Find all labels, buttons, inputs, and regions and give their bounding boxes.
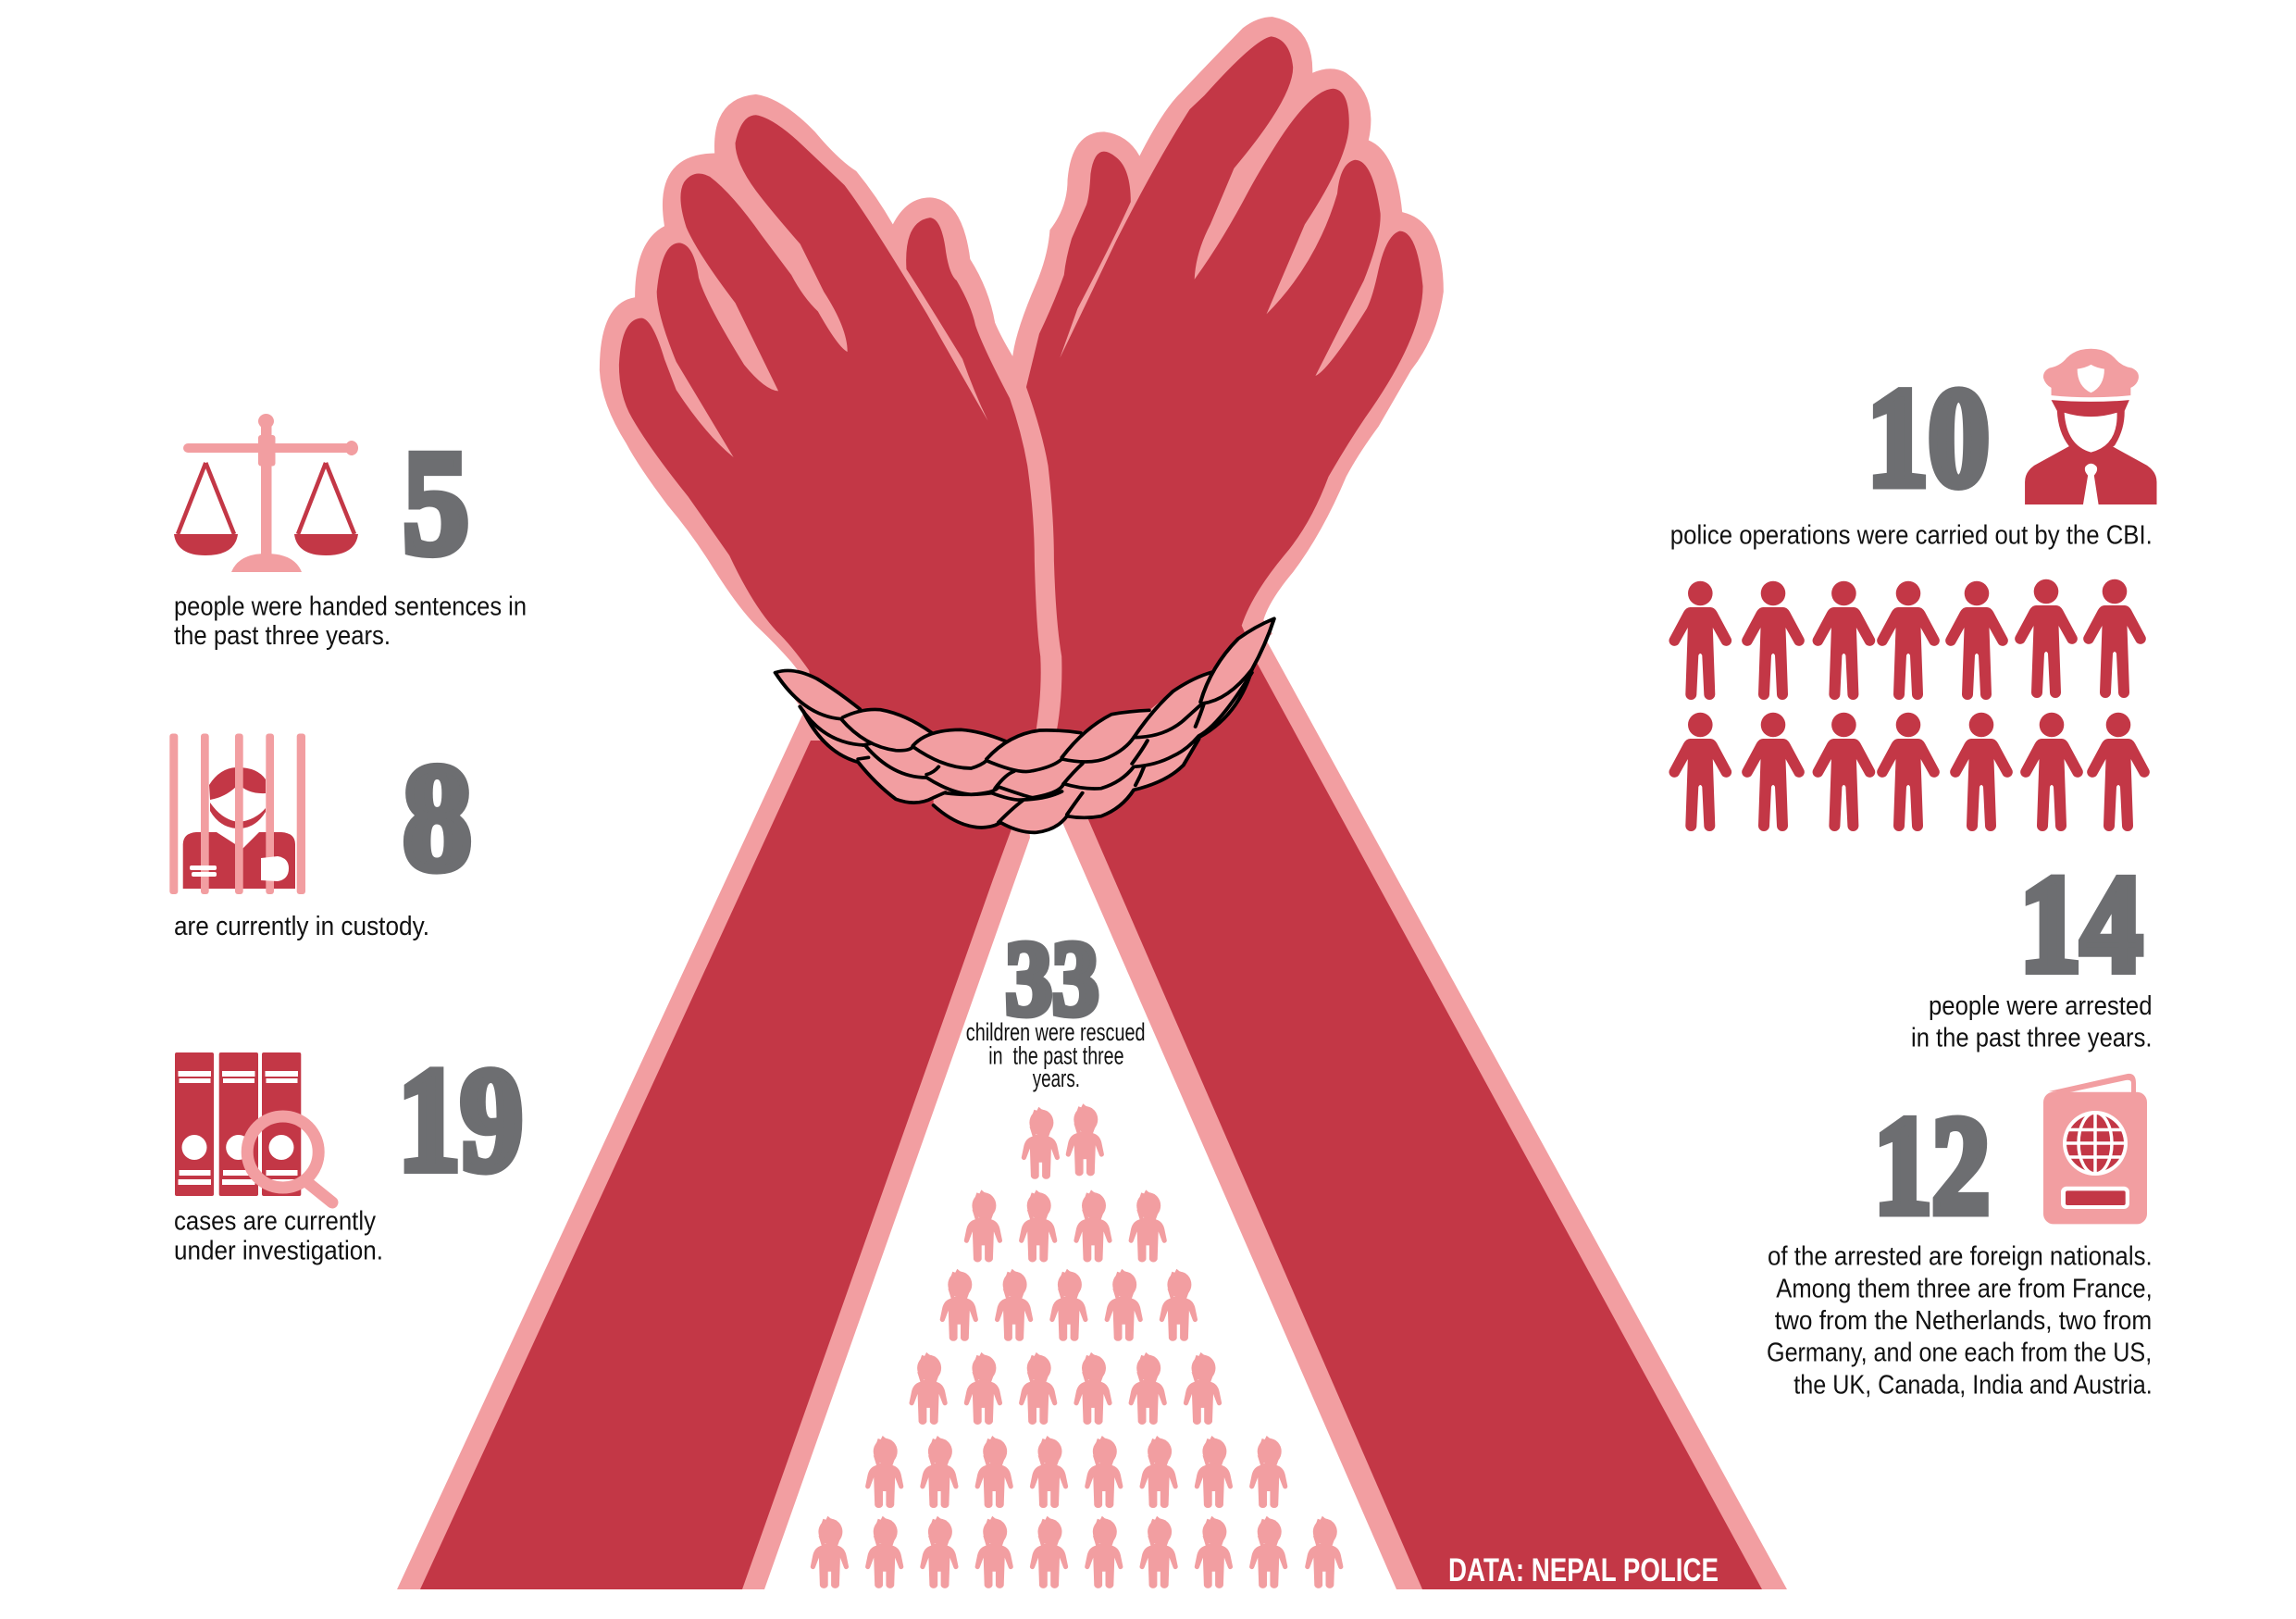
text: foreign nationals: Germany, and one each from the US, — [1767, 1339, 2152, 1368]
panel: investigation — [174, 1037, 523, 1266]
panel: custody — [169, 733, 472, 941]
text: children rescued: years. — [1033, 1065, 1080, 1092]
number: 10: 10 — [1868, 359, 1990, 515]
number: 33: 33 — [1005, 920, 1099, 1037]
left arm — [397, 699, 1030, 1589]
icon: case files and magnifier — [175, 1052, 332, 1202]
text: arrests: people were arrested — [1929, 991, 2153, 1021]
text: arrests — [1911, 991, 2153, 1053]
icon group: 33 children — [811, 1103, 1343, 1588]
panel: bound hands and arms illustration — [397, 17, 1787, 1589]
number: 8: 8 — [403, 734, 472, 902]
panel: arrests — [1911, 848, 2153, 1053]
number: 5: 5 — [403, 420, 469, 585]
panel: sentences — [174, 414, 527, 651]
text: foreign nationals: the UK, Canada, India and Austria. — [1793, 1370, 2153, 1400]
text: investigation: cases are currently — [174, 1207, 376, 1237]
text: investigation — [174, 1207, 383, 1266]
text: children rescued: in the past three — [988, 1042, 1123, 1070]
text: custody: are currently in custody. — [174, 912, 429, 941]
text: foreign nationals: Among them three are from France, — [1776, 1274, 2153, 1303]
text: children rescued: children were rescued — [966, 1018, 1146, 1046]
text: sentences: the past three years. — [174, 621, 391, 651]
text: children rescued — [966, 1018, 1146, 1092]
text: foreign nationals: two from the Netherlands, two from — [1775, 1306, 2152, 1336]
text: foreign nationals — [1767, 1242, 2153, 1400]
icon: prisoner behind bars — [169, 733, 305, 894]
icon: police officer — [2025, 349, 2157, 504]
text: sentences: people were handed sentences in — [174, 592, 527, 622]
source credit: DATA: NEPAL POLICE — [1448, 1552, 1719, 1588]
text: arrests: in the past three years. — [1911, 1024, 2153, 1053]
hands — [600, 17, 1444, 797]
text: foreign nationals: of the arrested are foreign nationals. — [1768, 1242, 2153, 1272]
panel: foreign nationals — [1767, 1074, 2153, 1400]
text: investigation: under investigation. — [174, 1237, 383, 1266]
rope — [776, 618, 1274, 832]
text: police operations: police operations were carried out by the CBI. — [1670, 520, 2153, 550]
number: 14: 14 — [2019, 848, 2141, 1001]
panel: children rescued — [811, 920, 1343, 1588]
panel: police operations — [1670, 349, 2157, 550]
icon: passport — [2043, 1074, 2147, 1224]
text: sentences — [174, 592, 527, 651]
right arm — [1055, 640, 1787, 1589]
number: 19: 19 — [398, 1037, 523, 1202]
icon: scales of justice — [174, 414, 358, 572]
icon group: 14 people arrested — [1669, 579, 2150, 831]
number: 12: 12 — [1874, 1087, 1990, 1242]
